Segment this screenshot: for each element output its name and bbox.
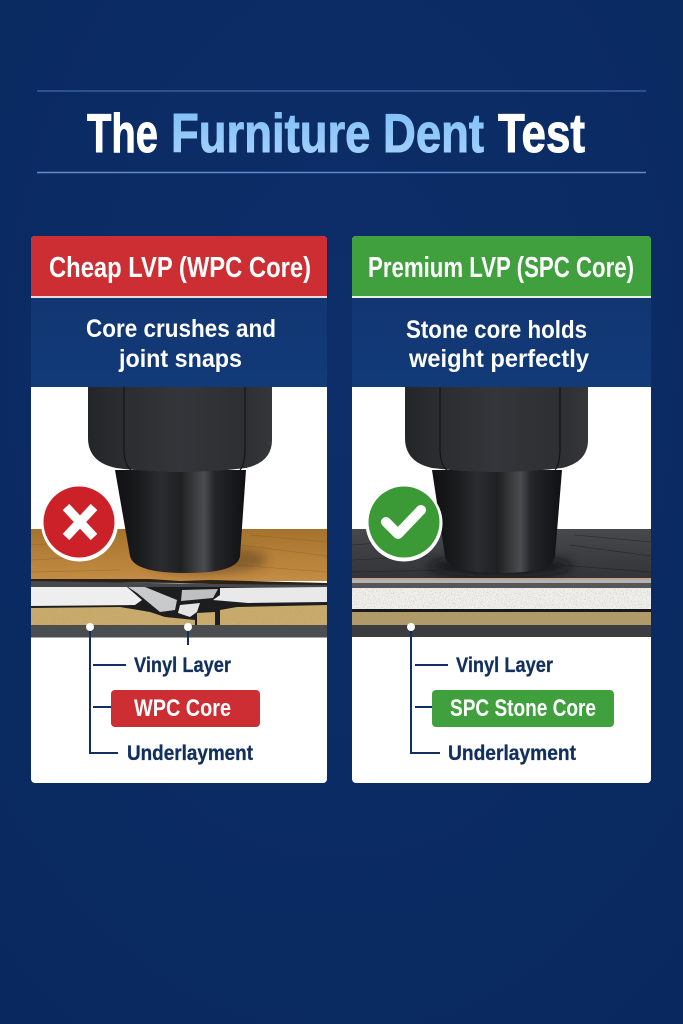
illustration: crushed floor cross-section bbox=[31, 387, 327, 638]
panel: premium LVP bbox=[352, 236, 651, 783]
subheading band: core crushes: joint snaps bbox=[118, 345, 242, 373]
icon: red X badge bbox=[41, 484, 118, 562]
title: The Furniture Dent Test: The bbox=[87, 102, 158, 164]
icon: green check badge bbox=[366, 484, 442, 562]
broken core layer bbox=[31, 587, 327, 626]
subheading band: stone core bbox=[352, 298, 651, 387]
leader lines bbox=[407, 623, 448, 753]
subheading band: stone core: weight perfectly bbox=[408, 345, 589, 373]
panel base bbox=[31, 236, 327, 783]
furniture leg bbox=[88, 387, 272, 573]
label: underlayment: Underlayment bbox=[127, 742, 253, 765]
furniture leg bbox=[405, 387, 588, 573]
title: The Furniture Dent Test: Furniture Dent bbox=[171, 102, 484, 164]
label: SPC stone core: SPC Stone Core bbox=[450, 695, 596, 722]
label: vinyl layer: Vinyl Layer bbox=[456, 654, 553, 677]
label: WPC core: WPC Core bbox=[134, 695, 231, 722]
label: SPC stone core bbox=[432, 690, 614, 727]
header: cheap LVP bbox=[31, 236, 327, 298]
label: WPC core bbox=[111, 690, 260, 727]
layer labels: cheap LVP bbox=[86, 623, 260, 765]
leader lines bbox=[86, 623, 192, 753]
layer labels: premium LVP bbox=[407, 623, 614, 765]
panel base bbox=[352, 236, 651, 783]
panel: cheap LVP bbox=[31, 236, 327, 783]
illustration: intact floor cross-section bbox=[352, 387, 651, 637]
subheading band: core crushes bbox=[31, 298, 327, 387]
title block bbox=[37, 91, 646, 172]
title: The Furniture Dent Test: Test bbox=[498, 102, 585, 164]
subheading band: core crushes: Core crushes and bbox=[86, 315, 276, 343]
label: vinyl layer: Vinyl Layer bbox=[134, 654, 231, 677]
header: cheap LVP: Cheap LVP (WPC Core) bbox=[49, 252, 311, 284]
intact stone core layer bbox=[352, 588, 651, 609]
label: underlayment: Underlayment bbox=[448, 742, 576, 765]
header: premium LVP bbox=[352, 236, 651, 298]
subheading band: stone core: Stone core holds bbox=[406, 316, 587, 344]
